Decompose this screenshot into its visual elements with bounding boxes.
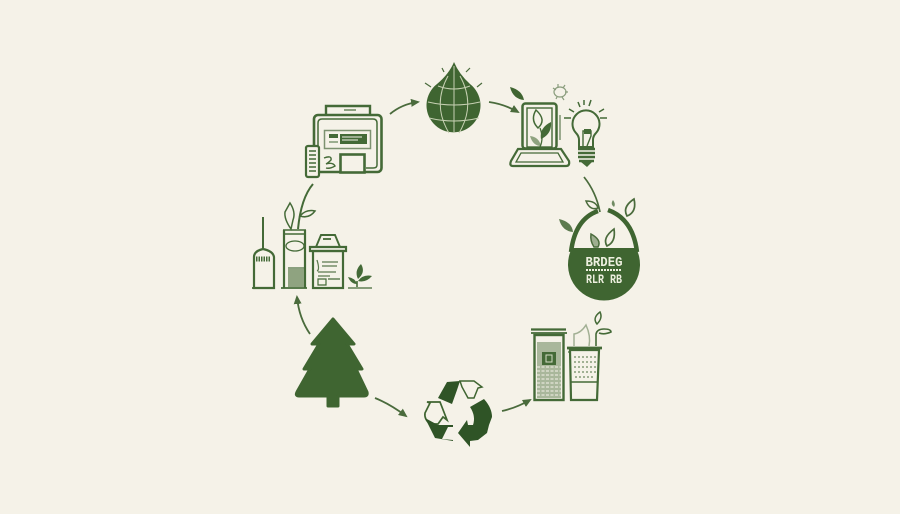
icon: printer machine	[306, 106, 382, 177]
icon: bag with leaves	[559, 199, 640, 300]
bag label: BRDEG	[586, 255, 622, 271]
arrow: tree to containers	[297, 297, 310, 334]
icon: light bulb	[564, 100, 607, 167]
icon: laptop with plant	[510, 104, 569, 166]
icon: recycling symbol	[425, 381, 492, 447]
arrow: tree to recycling	[375, 398, 406, 416]
arrow: cups to tree side	[502, 400, 530, 411]
icon: bag with leaves: RLR RB	[586, 272, 622, 287]
icon: globe droplet	[425, 62, 482, 133]
icon: pine tree	[296, 319, 367, 406]
arrow: globe to laptop	[489, 102, 518, 112]
icon: containers with sprout	[252, 184, 372, 288]
icon: leaf above laptop	[510, 87, 524, 100]
icon: small sun doodle	[553, 84, 568, 100]
icon: tall and short cups with plant	[531, 312, 611, 400]
arrow: bulb to bag	[584, 177, 600, 212]
arrow: printer to globe	[390, 102, 418, 114]
